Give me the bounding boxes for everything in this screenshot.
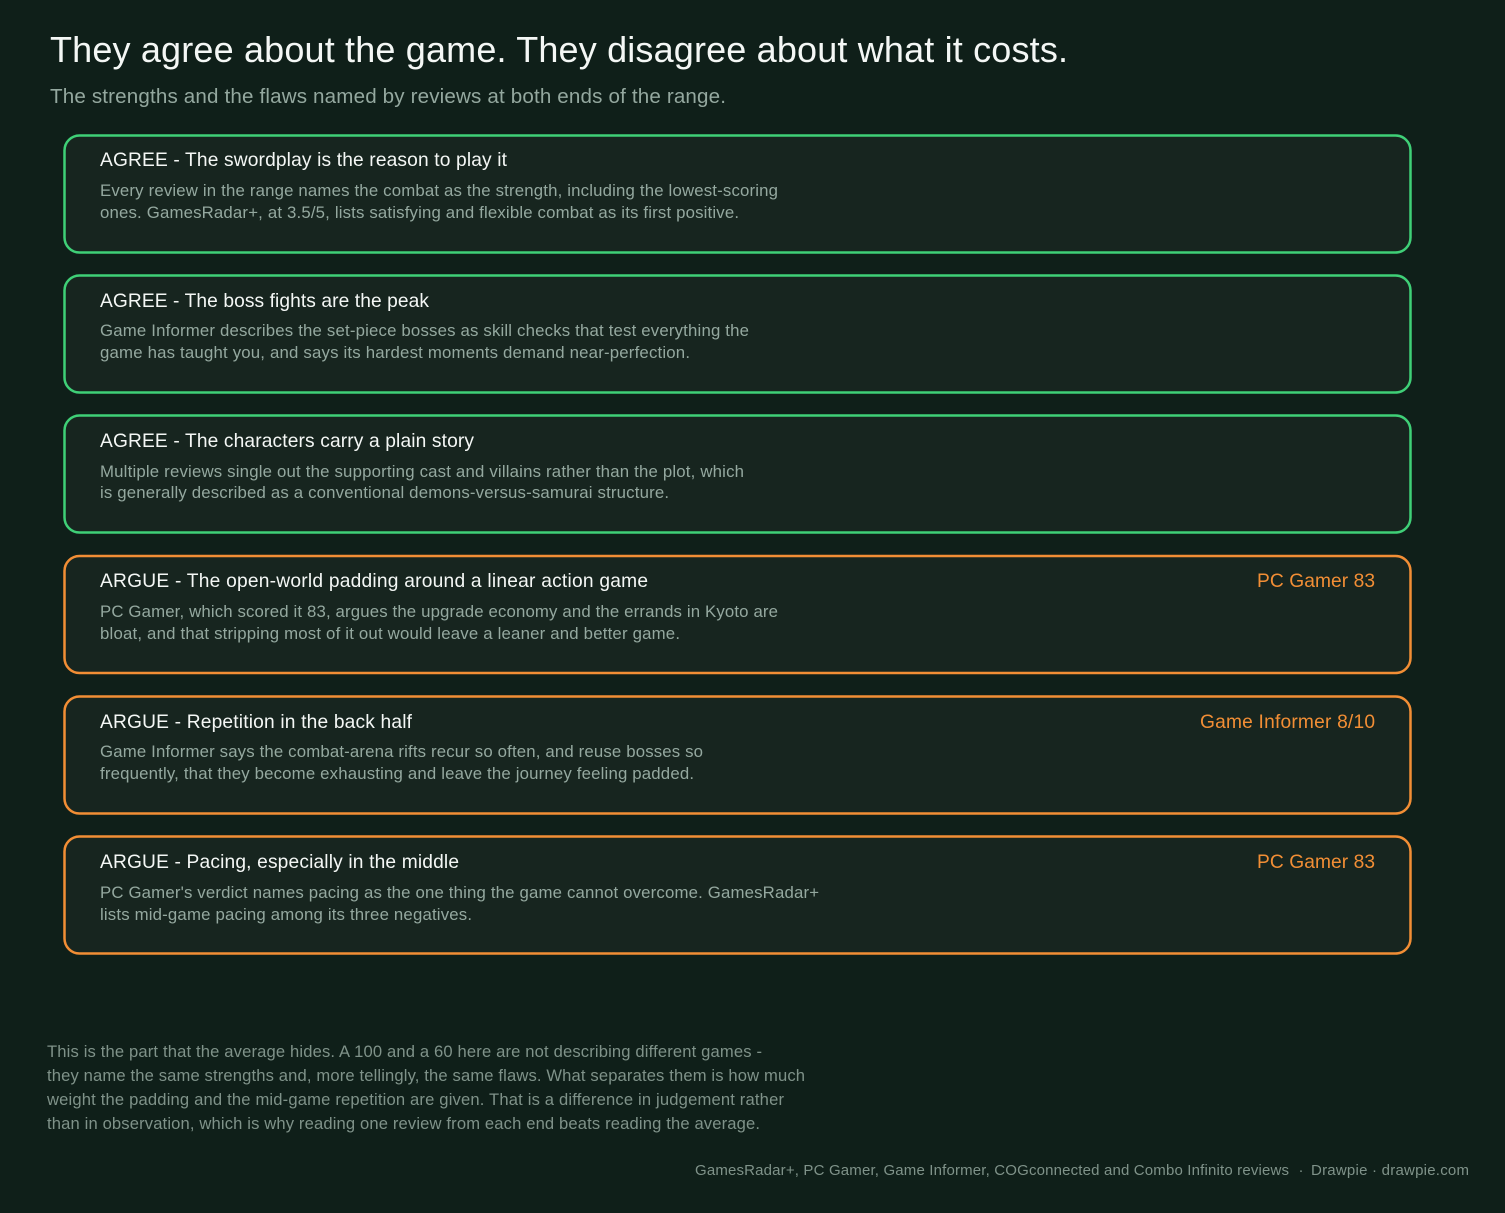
- panel: agree swordplay: AGREE - The swordplay is the reason to play it: [100, 150, 508, 171]
- panel: agree swordplay: ones. GamesRadar+, at 3.5/5, lists satisfying and flexible combat as its first positive.: [100, 203, 739, 222]
- panel: agree swordplay: [64, 136, 1410, 252]
- closing note: they name the same strengths and, more tellingly, the same flaws. What separates them is how much: [47, 1066, 805, 1085]
- panel: argue repetition: frequently, that they become exhausting and leave the journey feeling padded.: [100, 764, 694, 783]
- panel: agree characters: Multiple reviews single out the supporting cast and villains rather than the plot, which: [100, 462, 744, 481]
- closing note: than in observation, which is why reading one review from each end beats reading the average.: [47, 1114, 760, 1133]
- source credit: ·: [1298, 1162, 1304, 1179]
- panel: agree characters: is generally described as a conventional demons-versus-samurai structure.: [100, 483, 669, 502]
- panel: agree boss fights: Game Informer describes the set-piece bosses as skill checks that test everything the: [100, 321, 749, 340]
- panel: argue pacing: ARGUE - Pacing, especially in the middle: [100, 852, 459, 873]
- panel: argue open-world padding: [64, 556, 1410, 673]
- closing note: weight the padding and the mid-game repetition are given. That is a difference in judgement rather: [46, 1090, 784, 1109]
- panel: argue pacing: PC Gamer 83: [1257, 852, 1375, 873]
- panel: argue pacing: PC Gamer's verdict names pacing as the one thing the game cannot overcome. GamesRadar+: [100, 883, 819, 902]
- panel: argue open-world padding: ARGUE - The open-world padding around a linear action game: [100, 571, 648, 592]
- panel: argue pacing: [64, 836, 1410, 954]
- closing note: [46, 1042, 805, 1133]
- panel: agree characters: [64, 416, 1410, 532]
- source credit: Drawpie · drawpie.com: [1311, 1162, 1469, 1179]
- subtitle: The strengths and the flaws named by reviews at both ends of the range.: [50, 85, 726, 108]
- panel: agree boss fights: game has taught you, and says its hardest moments demand near-perfection.: [100, 343, 690, 362]
- closing note: This is the part that the average hides. A 100 and a 60 here are not describing different games -: [47, 1042, 762, 1061]
- panel: argue repetition: [64, 696, 1410, 814]
- panel: argue open-world padding: PC Gamer, which scored it 83, argues the upgrade economy and the errands in Kyoto are: [100, 602, 778, 621]
- panel: argue open-world padding: bloat, and that stripping most of it out would leave a leaner and better game.: [100, 624, 680, 643]
- panel: argue repetition: ARGUE - Repetition in the back half: [100, 712, 413, 733]
- source credit: GamesRadar+, PC Gamer, Game Informer, COGconnected and Combo Infinito reviews: [695, 1162, 1289, 1179]
- panel: agree boss fights: AGREE - The boss fights are the peak: [100, 291, 429, 312]
- panel: argue repetition: Game Informer 8/10: [1200, 712, 1375, 733]
- panel: argue repetition: Game Informer says the combat-arena rifts recur so often, and reuse bosses so: [100, 742, 703, 761]
- panel: argue open-world padding: PC Gamer 83: [1257, 571, 1375, 592]
- title: They agree about the game. They disagree about what it costs.: [50, 29, 1068, 70]
- panel: agree swordplay: Every review in the range names the combat as the strength, including the lowest-scoring: [100, 181, 778, 200]
- panel: agree boss fights: [64, 276, 1410, 392]
- panel: argue pacing: lists mid-game pacing among its three negatives.: [100, 905, 472, 924]
- panel: agree characters: AGREE - The characters carry a plain story: [100, 431, 474, 452]
